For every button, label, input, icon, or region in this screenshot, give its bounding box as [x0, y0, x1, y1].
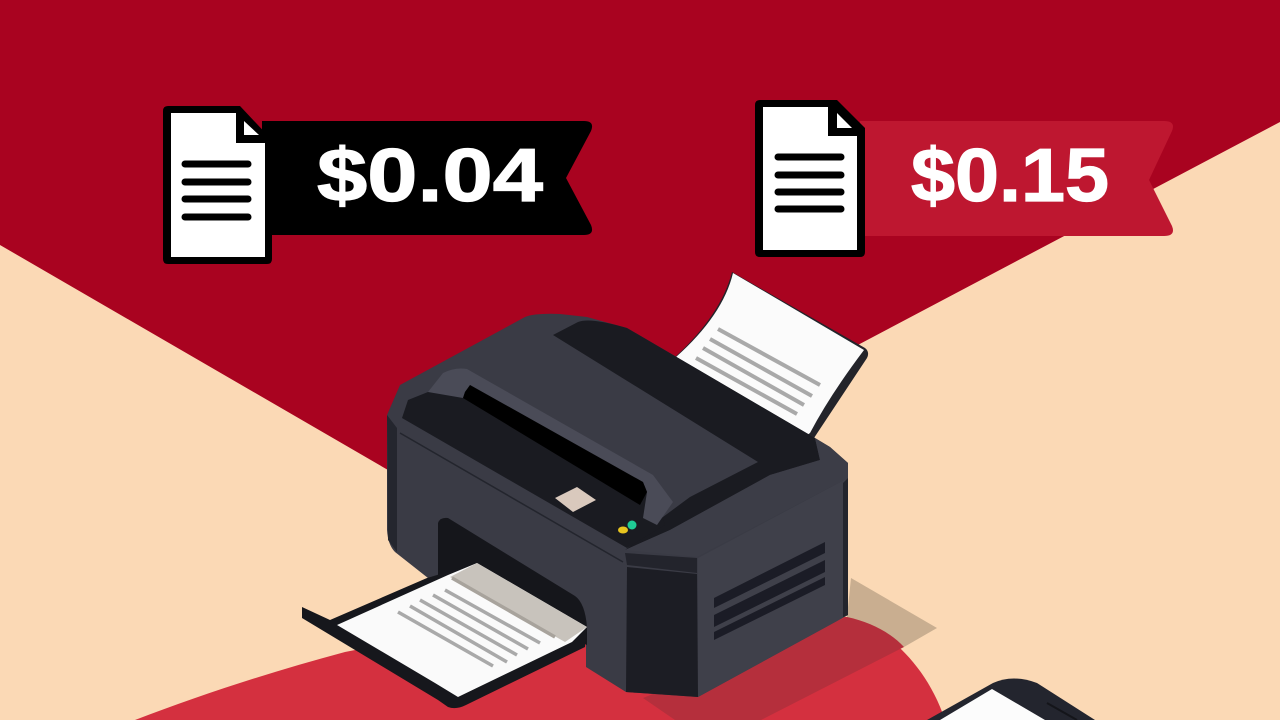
- side vents: [714, 542, 825, 640]
- page shadow: [450, 563, 587, 642]
- rear paper sheet: [674, 272, 868, 440]
- slot surround: [428, 368, 673, 525]
- paper slot: [463, 385, 647, 505]
- black ribbon: [262, 121, 592, 235]
- right edge shading: [843, 478, 848, 617]
- rear dark strip: [553, 320, 820, 550]
- top chamfer band: [625, 438, 848, 557]
- phone corner: [927, 678, 1095, 720]
- badge: low price $0.04: [163, 106, 592, 264]
- printer shadow on red: [643, 617, 904, 720]
- price text: $0.15: [911, 133, 1109, 217]
- printer shadow on cream: [847, 578, 937, 647]
- output opening: [438, 518, 587, 645]
- printer: [387, 314, 848, 697]
- output tray with printed page: [302, 563, 587, 708]
- right side panel: [698, 478, 848, 697]
- control button: [555, 487, 596, 512]
- red ribbon: [860, 121, 1173, 236]
- document icon: [163, 106, 272, 264]
- front edge band: [625, 553, 697, 573]
- front top seam line: [400, 433, 623, 562]
- status light: green: [628, 520, 636, 530]
- printer body silhouette: [387, 314, 848, 697]
- document icon: [755, 100, 865, 257]
- status light: yellow: [618, 526, 628, 534]
- printed page: [337, 563, 587, 697]
- left dark deck: [402, 390, 665, 548]
- background: bright red curved floor: [135, 615, 945, 720]
- badge: high price $0.15: [755, 100, 1173, 257]
- tray: [302, 563, 587, 708]
- front corner panel: [626, 567, 698, 697]
- price text: $0.04: [317, 133, 543, 217]
- page text lines: [398, 578, 555, 666]
- left edge shading: [387, 415, 397, 552]
